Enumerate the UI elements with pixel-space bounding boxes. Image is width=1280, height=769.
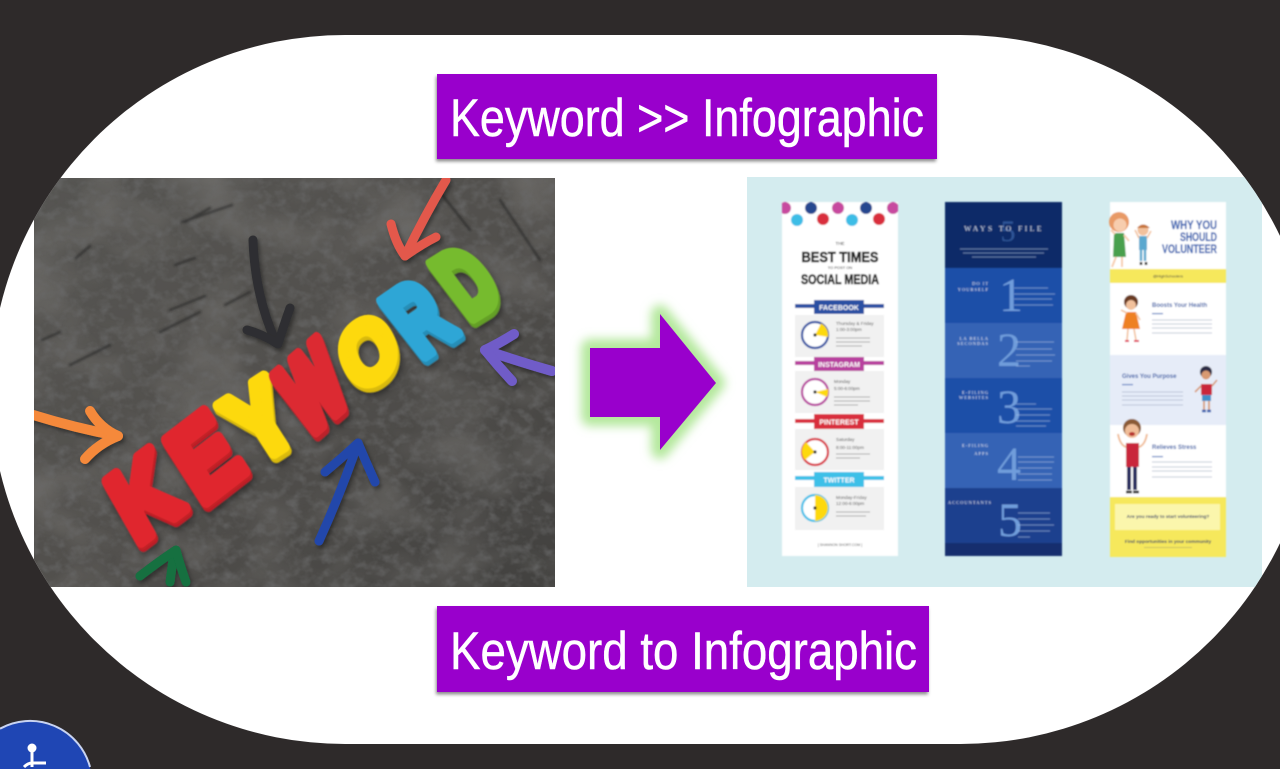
- letters: KEYWORD: K: [91, 428, 197, 564]
- heading: Keyword >> Infographic: [437, 74, 937, 159]
- icons: social media bubbles: [779, 202, 899, 226]
- concrete scratches: [42, 192, 540, 365]
- labels: APPS: [974, 451, 989, 456]
- numbered list: 1: [999, 269, 1023, 322]
- title: ways to file: WAYS TO FILE: [964, 224, 1044, 233]
- title: best times: BEST TIMES: [802, 249, 878, 266]
- labels: LA BELLA: [960, 336, 989, 341]
- section: boosts your health: Boosts Your Health: [1152, 303, 1207, 309]
- section: gives you purpose: [1110, 355, 1226, 425]
- letters: KEYWORD: O: [323, 292, 413, 411]
- section: pinterest: 8:00-11:00pm: [836, 445, 864, 450]
- numbered list: 5: [998, 494, 1022, 547]
- photo: colourful KEYWORD letters with arrows on concrete: [30, 178, 555, 587]
- infographic: best times to post on social media: [779, 202, 899, 556]
- section: instagram: INSTAGRAM: [818, 362, 860, 369]
- panel: pale blue infographic examples: [747, 177, 1262, 587]
- section: facebook: FACEBOOK: [819, 305, 859, 312]
- section: instagram: 5:00-6:00pm: [834, 386, 860, 391]
- numbered list: 2: [997, 324, 1021, 377]
- numbered list: 4: [997, 438, 1021, 491]
- section: instagram: [795, 357, 884, 413]
- illustration: girl: [1121, 295, 1140, 341]
- letters: KEYWORD: [100, 247, 505, 556]
- labels: SECONDAS: [957, 341, 989, 346]
- labels: ACCOUNTANTS: [948, 500, 992, 505]
- yellow strip: [1110, 269, 1226, 283]
- call to action: [1110, 497, 1226, 557]
- icon: purple arrow: [485, 334, 552, 381]
- title: why you should volunteer: [1162, 218, 1217, 256]
- section: twitter: 12:00-6:00pm: [836, 501, 865, 506]
- title: best times: [801, 241, 879, 287]
- heading: Keyword to Infographic: Keyword to Infographic: [450, 622, 917, 681]
- title: best times: THE: [836, 241, 844, 246]
- section: facebook: Thursday & Friday: [836, 321, 874, 326]
- footer credit: [ SHANNON SHORT.COM ]: [818, 543, 862, 547]
- body lines: [1014, 288, 1055, 537]
- call to action: Find opportunities in your community: [1125, 539, 1212, 545]
- labels: DO IT: [972, 281, 989, 286]
- labels: [948, 281, 992, 505]
- labels: YOURSELF: [958, 287, 989, 292]
- icon: blue arrow: [319, 443, 375, 541]
- section: pinterest: Saturday: [836, 437, 855, 442]
- illustration: shouting man: [1118, 419, 1147, 492]
- illustration: waving boy: [1195, 366, 1217, 411]
- numbered list: 3: [997, 381, 1021, 434]
- icon: orange arrow: [30, 411, 118, 459]
- section: boosts your health: [1121, 295, 1212, 341]
- yellow strip: @HighSchoolers: [1153, 274, 1183, 278]
- section: twitter: [795, 472, 884, 530]
- icon: accessibility badge: [0, 721, 90, 769]
- labels: WEBSITES: [959, 395, 989, 400]
- section: facebook: 1:00-3:00pm: [836, 327, 862, 332]
- icon: coral arrow: [391, 180, 446, 256]
- title: why you should volunteer: SHOULD: [1180, 230, 1217, 244]
- title: why you should volunteer: VOLUNTEER: [1162, 242, 1217, 256]
- infographic: why you should volunteer: [1109, 202, 1226, 557]
- heading: Keyword >> Infographic: Keyword >> Infographic: [450, 89, 924, 148]
- title: why you should volunteer: WHY YOU: [1171, 218, 1217, 232]
- section: pinterest: [795, 414, 884, 470]
- letters: KEYWORD: E: [149, 389, 260, 524]
- section: facebook: [795, 300, 884, 357]
- section: relieves stress: [1118, 419, 1212, 492]
- labels: E-FILING: [962, 390, 989, 395]
- section: relieves stress: Relieves Stress: [1152, 445, 1197, 451]
- heading: Keyword to Infographic: [437, 606, 929, 692]
- letters: KEYWORD: Y: [205, 358, 315, 484]
- title: best times: TO POST ON: [828, 265, 852, 270]
- infographic: 5 ways to file: [945, 202, 1062, 556]
- section: gives you purpose: Gives You Purpose: [1122, 374, 1177, 380]
- labels: E-FILING: [962, 443, 989, 448]
- call to action: Are you ready to start volunteering?: [1127, 514, 1209, 520]
- icon: green arrow: [140, 550, 186, 582]
- numbered list: [997, 278, 1022, 538]
- title: best times: SOCIAL MEDIA: [801, 271, 879, 287]
- section: twitter: TWITTER: [823, 478, 855, 484]
- letters: KEYWORD: R: [365, 261, 474, 377]
- title: ways to file: [960, 215, 1048, 257]
- letters: KEYWORD: D: [414, 226, 519, 338]
- section: pinterest: PINTEREST: [819, 420, 859, 426]
- arrow: purple right arrow with green glow: [590, 314, 716, 450]
- icon: black arrow: [247, 240, 290, 344]
- letters: KEYWORD: W: [263, 320, 361, 457]
- section: twitter: Monday-Friday: [836, 495, 867, 500]
- title: ways to file: 5: [1000, 215, 1016, 248]
- illustration: mother and child: [1109, 212, 1151, 267]
- section: instagram: Monday: [834, 379, 851, 384]
